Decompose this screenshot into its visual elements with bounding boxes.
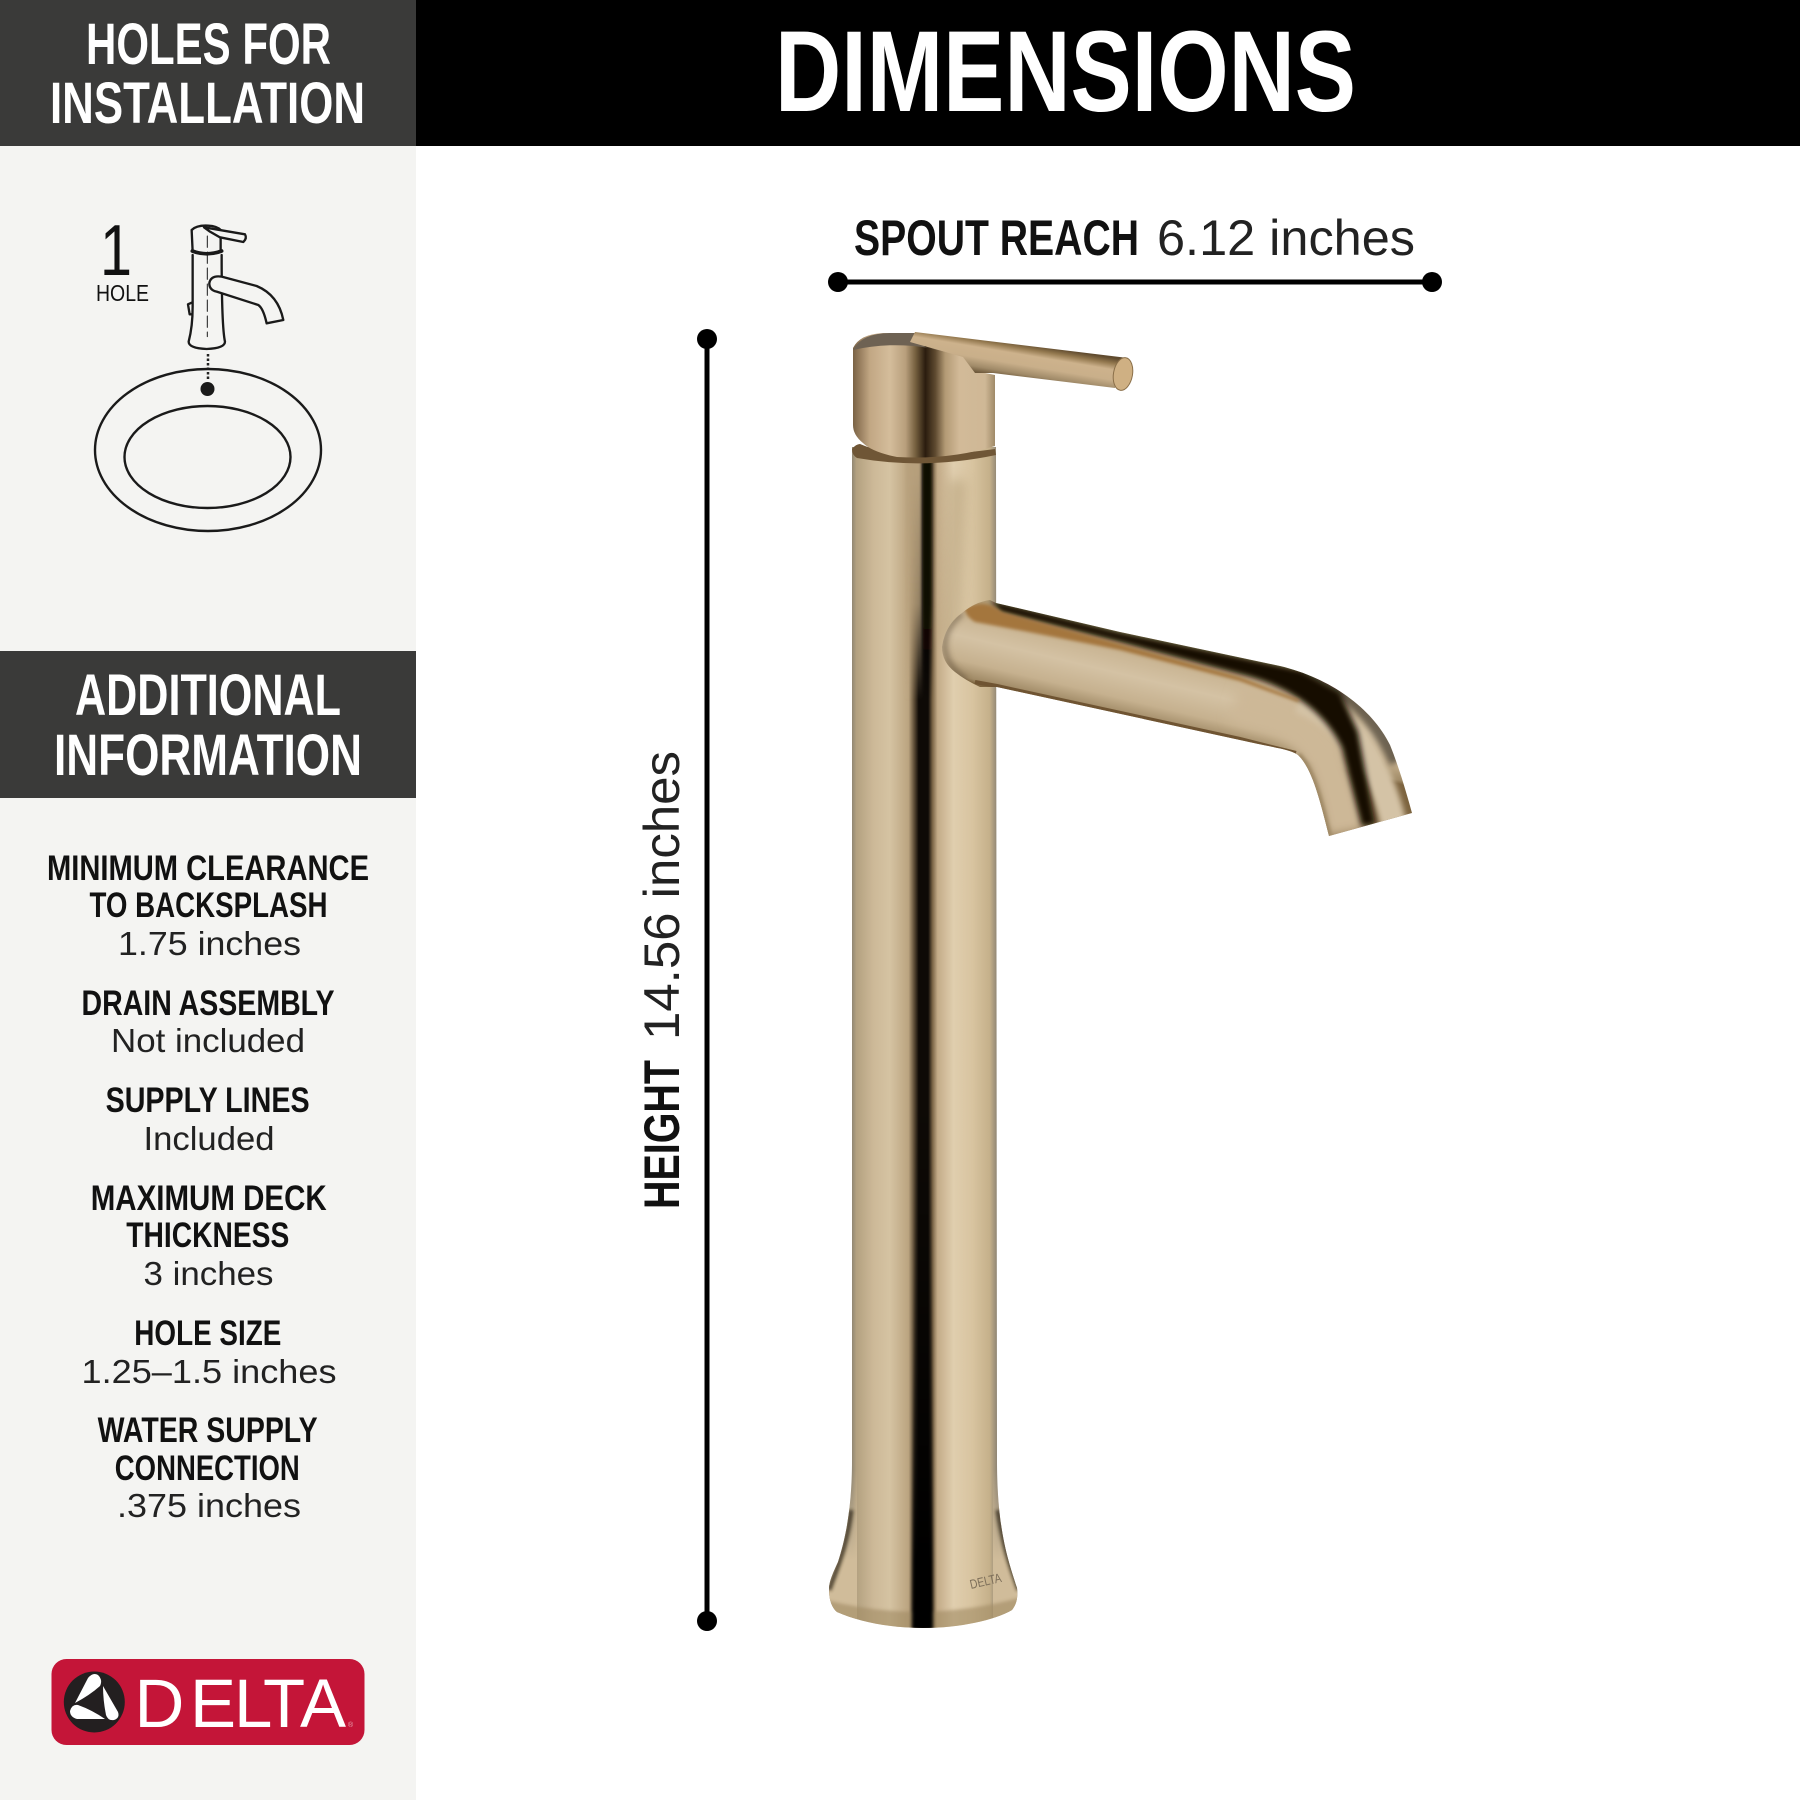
lever <box>910 332 1135 392</box>
header: holes for installation: INSTALLATION <box>50 71 365 136</box>
spec: maximum deck thickness: 3 inches <box>144 1255 274 1292</box>
spec: water supply connection: .375 inches <box>117 1487 301 1524</box>
spec: supply lines: Included <box>144 1120 274 1157</box>
spec: drain assembly: Not included <box>111 1022 305 1059</box>
spec: maximum deck thickness: MAXIMUM DECK <box>91 1179 327 1218</box>
faucet body <box>825 447 1023 1640</box>
logo: delta: ® <box>348 1721 354 1729</box>
faucet photo <box>825 332 1412 1640</box>
spec: hole size: 1.25–1.5 inches <box>82 1353 336 1390</box>
spec: hole size: HOLE SIZE <box>134 1314 281 1353</box>
specifications list <box>47 849 369 1524</box>
spout <box>942 600 1412 836</box>
spec: water supply connection: WATER SUPPLY <box>98 1411 318 1450</box>
mounting hole <box>200 382 214 396</box>
spec: drain assembly <box>82 984 334 1059</box>
spec: maximum deck thickness <box>91 1179 327 1292</box>
spec: water supply connection <box>98 1411 318 1524</box>
title: dimensions <box>416 0 1800 146</box>
spec: supply lines <box>106 1081 310 1157</box>
icon: one hole installation diagram <box>95 211 321 531</box>
header: additional information <box>0 651 416 798</box>
header: additional information: ADDITIONAL <box>75 663 341 728</box>
spec: supply lines: SUPPLY LINES <box>106 1081 310 1120</box>
header: holes for installation <box>0 0 416 146</box>
sink basin <box>124 406 290 508</box>
spec: minimum clearance: 1.75 inches <box>118 925 301 962</box>
body top ring <box>852 444 996 463</box>
dimension: height <box>634 329 717 1631</box>
spec: drain assembly: DRAIN ASSEMBLY <box>82 984 334 1023</box>
handle cap <box>853 333 995 458</box>
panel: left sidebar <box>0 0 416 1800</box>
dimension: height: HEIGHT <box>634 1060 690 1209</box>
spec: minimum clearance <box>47 849 369 962</box>
hole count <box>96 211 149 306</box>
icon: faucet line drawing <box>188 226 283 349</box>
base engraving: DELTA <box>968 1570 1003 1592</box>
hole count: HOLE <box>96 280 149 306</box>
dimension: height: 14.56 inches <box>634 751 690 1040</box>
spec: minimum clearance: TO BACKSPLASH <box>90 886 328 925</box>
dimension: spout reach <box>828 210 1442 292</box>
header: additional information: INFORMATION <box>54 723 362 788</box>
spec: maximum deck thickness: THICKNESS <box>126 1216 289 1255</box>
sink outer rim <box>95 369 321 531</box>
header: holes for installation: HOLES FOR <box>86 12 331 77</box>
dimension: spout reach: 6.12 inches <box>1157 210 1415 266</box>
logo emblem <box>64 1672 125 1732</box>
hole count: 1 <box>100 211 132 291</box>
spec: minimum clearance: MINIMUM CLEARANCE <box>47 849 369 888</box>
spec: water supply connection: CONNECTION <box>115 1449 300 1488</box>
logo wordmark: DELTA <box>134 1665 346 1742</box>
logo: delta <box>52 1659 364 1745</box>
spec: hole size <box>82 1314 336 1390</box>
dimension: spout reach: SPOUT REACH <box>854 210 1139 266</box>
dotted connector <box>207 354 209 380</box>
title: dimensions: DIMENSIONS <box>775 8 1356 136</box>
